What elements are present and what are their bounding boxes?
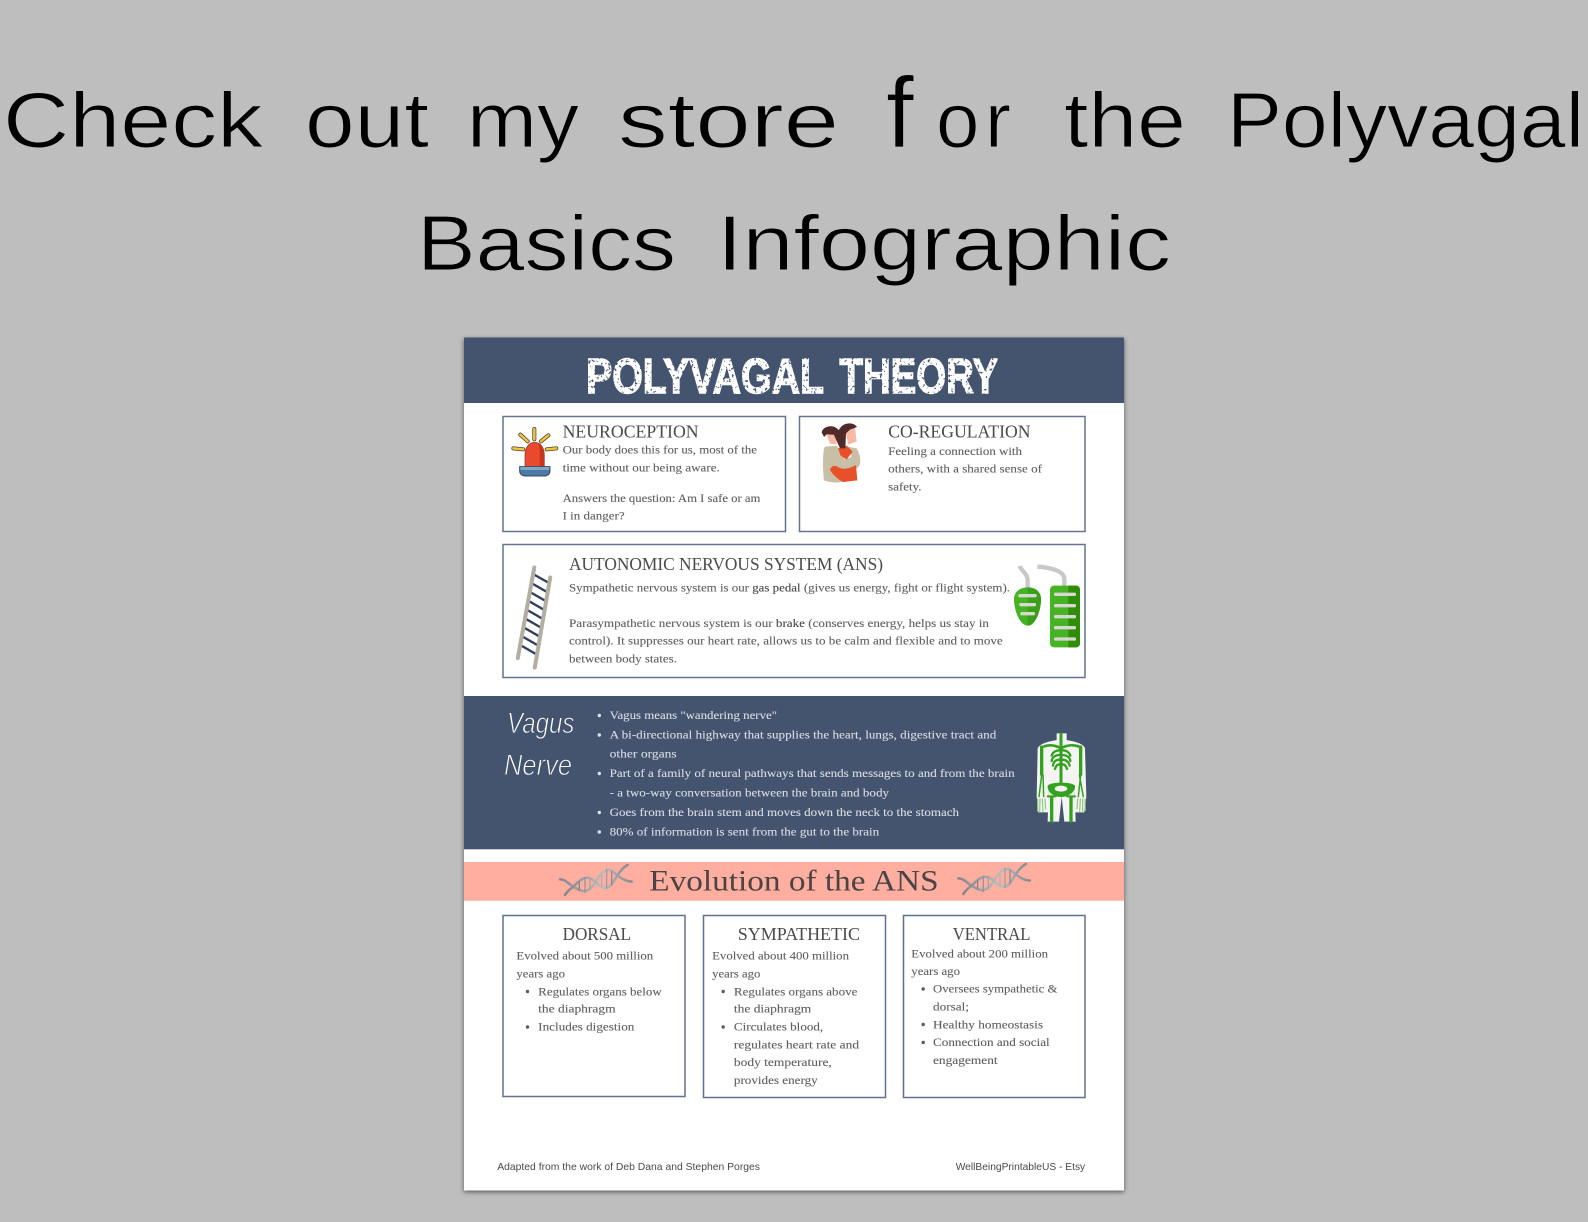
text: co-regulation description bbox=[888, 444, 1042, 493]
icon: gas and brake pedals bbox=[1014, 566, 1080, 647]
text: ventral description: years ago bbox=[911, 964, 960, 978]
text: autonomic nervous system description bbox=[569, 581, 1010, 665]
text: neuroception description bbox=[563, 442, 761, 523]
text: sympathetic description: provides energy bbox=[734, 1073, 818, 1087]
text: dorsal description: the diaphragm bbox=[538, 1002, 616, 1016]
footer: attribution: Adapted from the work of Deb Dana and Stephen Porges bbox=[497, 1161, 760, 1173]
text: vagus nerve bullet list: other organs bbox=[610, 747, 677, 761]
heading: sympathetic: SYMPATHETIC bbox=[738, 924, 860, 944]
poster title: THEORY bbox=[840, 350, 998, 404]
text: sympathetic description: body temperature, bbox=[734, 1055, 832, 1069]
poster title: POLYVAGAL bbox=[586, 350, 824, 404]
text: sympathetic description: regulates heart rate and bbox=[734, 1037, 859, 1051]
text: vagus nerve bullet list: Vagus means "wandering nerve" bbox=[610, 708, 777, 722]
text: dorsal description: Includes digestion bbox=[538, 1020, 634, 1034]
heading: vagus nerve: Nerve bbox=[504, 749, 572, 782]
store headline: my bbox=[467, 76, 579, 164]
text: sympathetic description: Regulates organs above bbox=[734, 984, 857, 998]
text: vagus nerve bullet list: Goes from the brain stem and moves down the neck to the stomach bbox=[610, 805, 959, 819]
text: vagus nerve bullet list: - a two-way conversation between the brain and body bbox=[610, 786, 889, 800]
text: co-regulation description: Feeling a connection with bbox=[888, 444, 1022, 458]
text: sympathetic description: the diaphragm bbox=[734, 1002, 812, 1016]
panel: autonomic nervous system bbox=[503, 544, 1085, 678]
text: sympathetic description: years ago bbox=[712, 966, 760, 980]
heading: autonomic nervous system: AUTONOMIC NERVOUS SYSTEM (ANS) bbox=[569, 554, 883, 575]
heading: neuroception: NEUROCEPTION bbox=[563, 421, 699, 441]
text: sympathetic description: Circulates blood, bbox=[734, 1020, 823, 1034]
text: ventral description: Healthy homeostasis bbox=[933, 1017, 1043, 1031]
text: neuroception description: time without our being aware. bbox=[563, 460, 720, 474]
text: neuroception description: Answers the question: Am I safe or am bbox=[563, 491, 761, 505]
heading: dorsal: DORSAL bbox=[563, 924, 631, 944]
heading: ventral: VENTRAL bbox=[953, 924, 1030, 944]
text: ventral description: dorsal; bbox=[933, 1000, 969, 1014]
store headline: Check bbox=[3, 76, 264, 164]
header band bbox=[464, 338, 1124, 404]
icon: ladder bbox=[518, 568, 550, 668]
icon: skeleton torso bbox=[1037, 733, 1086, 822]
text: ventral description: Oversees sympathetic & bbox=[933, 982, 1058, 996]
text: vagus nerve bullet list: 80% of information is sent from the gut to the brain bbox=[610, 824, 879, 838]
text: dorsal description: Evolved about 500 million bbox=[516, 948, 653, 962]
evolution banner bbox=[464, 862, 1124, 901]
store headline: store bbox=[618, 76, 839, 164]
heading: vagus nerve: Vagus bbox=[507, 707, 574, 740]
text: autonomic nervous system description: Sympathetic nervous system is our gas pedal (gives us energy, fight or flight system). bbox=[569, 581, 1010, 595]
panel: dorsal bbox=[503, 916, 685, 1096]
heading: vagus nerve bbox=[504, 707, 574, 782]
text: autonomic nervous system description: between body states. bbox=[569, 651, 677, 665]
panel: neuroception bbox=[503, 416, 786, 532]
panel: sympathetic bbox=[704, 916, 886, 1098]
text: ventral description: Evolved about 200 million bbox=[911, 946, 1048, 960]
footer: shop name: WellBeingPrintableUS - Etsy bbox=[956, 1161, 1086, 1173]
text: neuroception description: Our body does this for us, most of the bbox=[563, 442, 757, 456]
panel: co-regulation bbox=[800, 416, 1085, 532]
text: vagus nerve bullet list: Part of a family of neural pathways that sends messages to and from the brain bbox=[610, 766, 1015, 780]
text: ventral description: engagement bbox=[933, 1053, 998, 1067]
store headline: out bbox=[305, 76, 429, 164]
icon: two people hugging bbox=[822, 423, 860, 482]
store headline: the bbox=[1064, 76, 1186, 164]
panel: ventral bbox=[904, 916, 1085, 1098]
text: ventral description bbox=[911, 946, 1058, 1067]
heading: co-regulation: CO-REGULATION bbox=[888, 421, 1031, 441]
text: neuroception description: I in danger? bbox=[563, 509, 625, 523]
store headline: Basics bbox=[417, 199, 676, 287]
text: co-regulation description: others, with a shared sense of bbox=[888, 462, 1042, 476]
store headline: Polyvagal bbox=[1227, 76, 1584, 164]
text: dorsal description: Regulates organs below bbox=[538, 984, 662, 998]
text: ventral description: Connection and social bbox=[933, 1035, 1050, 1049]
store headline bbox=[3, 57, 1584, 287]
store headline: f or bbox=[886, 57, 1011, 169]
text: autonomic nervous system description: Parasympathetic nervous system is our brake (conserves energy, helps us stay in bbox=[569, 616, 989, 630]
text: co-regulation description: safety. bbox=[888, 479, 922, 493]
text: dorsal description bbox=[516, 948, 662, 1034]
heading: evolution of the ANS: Evolution of the ANS bbox=[649, 865, 939, 898]
panel: vagus nerve bbox=[464, 696, 1124, 849]
text: vagus nerve bullet list bbox=[598, 708, 1015, 838]
text: vagus nerve bullet list: A bi-directional highway that supplies the heart, lungs, digestive tract and bbox=[610, 727, 996, 741]
icon: siren bbox=[513, 429, 556, 476]
poster sheet bbox=[464, 338, 1124, 1192]
store headline: Infographic bbox=[717, 199, 1171, 287]
text: autonomic nervous system description: control). It suppresses our heart rate, allows us to be calm and flexible and to move bbox=[569, 634, 1003, 648]
icon: DNA strand right bbox=[958, 864, 1030, 894]
text: sympathetic description bbox=[712, 948, 859, 1087]
icon: DNA strand left bbox=[560, 865, 632, 895]
text: sympathetic description: Evolved about 400 million bbox=[712, 948, 849, 962]
text: dorsal description: years ago bbox=[516, 966, 565, 980]
